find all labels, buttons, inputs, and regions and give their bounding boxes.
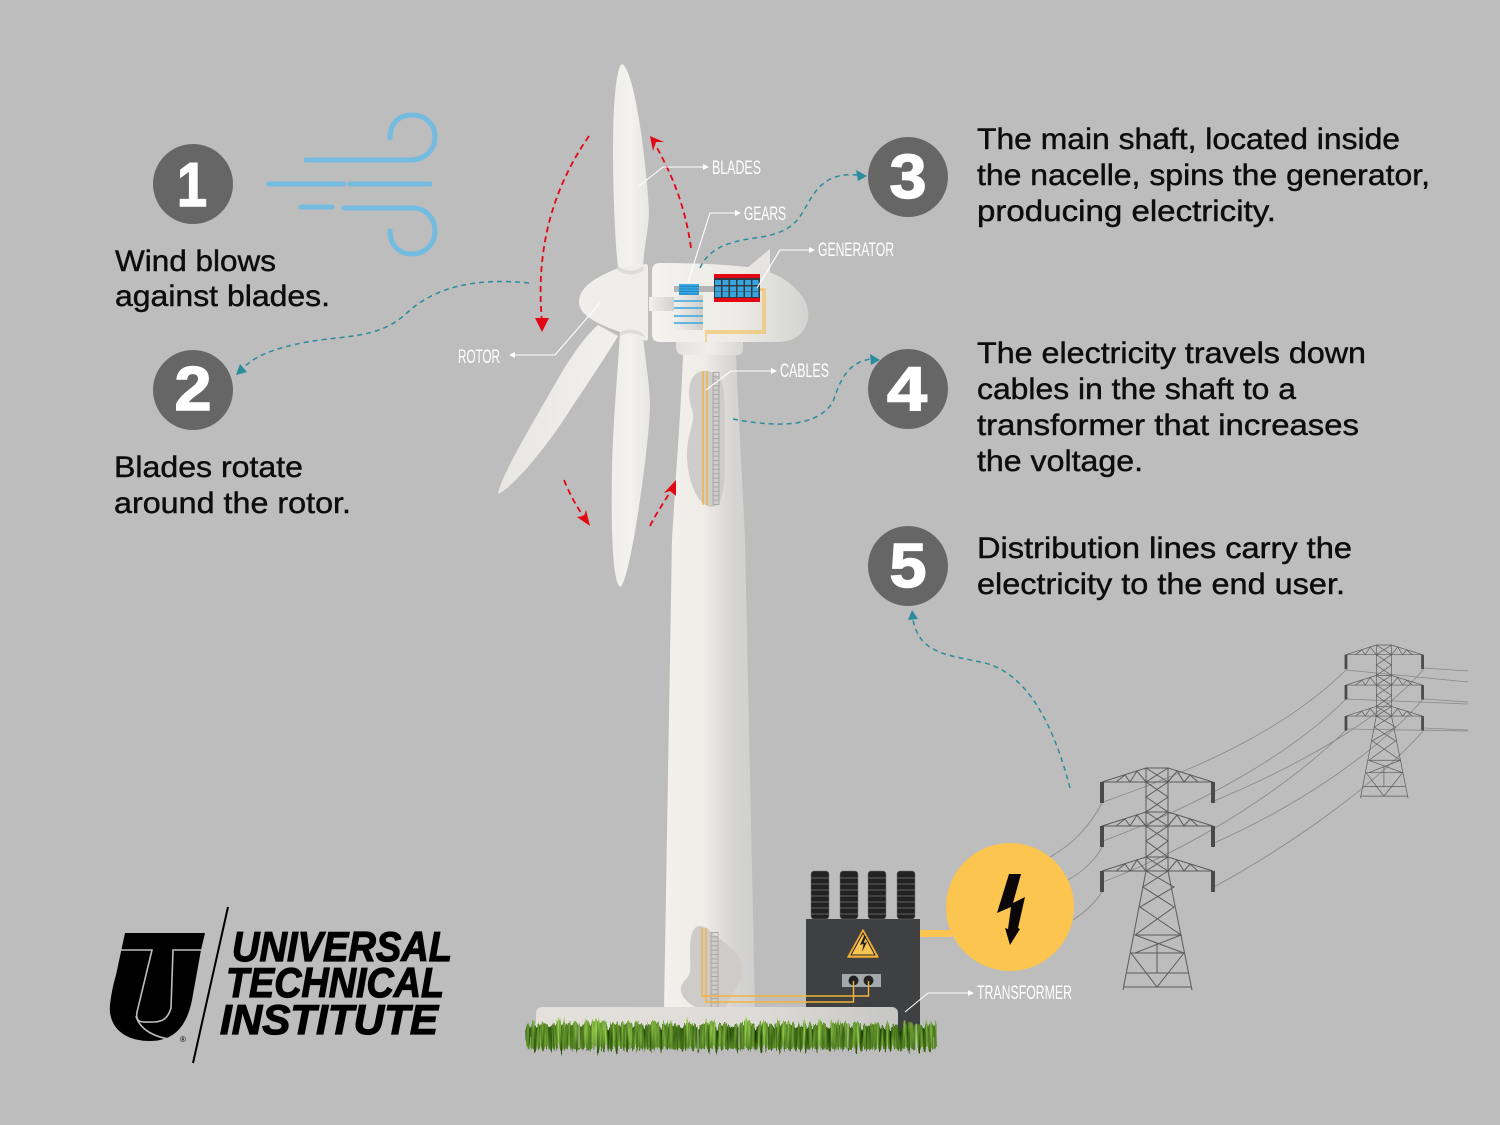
grass bbox=[527, 1022, 936, 1050]
step 3 number bbox=[868, 137, 948, 217]
step 4 text: transformer that increases bbox=[977, 409, 1359, 442]
label: transformer: TRANSFORMER bbox=[977, 983, 1072, 1004]
label: rotor: ROTOR bbox=[458, 347, 500, 368]
step 1 bbox=[115, 144, 330, 313]
step 3 bbox=[868, 123, 1430, 228]
step 5 text: electricity to the end user. bbox=[977, 568, 1345, 601]
arrow: downward left bbox=[535, 136, 589, 332]
blade: bottom bbox=[612, 329, 650, 587]
nacelle fin bbox=[747, 249, 770, 280]
step 3 text bbox=[977, 123, 1430, 228]
main shaft bbox=[674, 286, 716, 292]
step 3 text: the nacelle, spins the generator, bbox=[977, 159, 1430, 192]
step 2 text: around the rotor. bbox=[114, 487, 351, 520]
logo wordmark: TECHNICAL bbox=[226, 959, 444, 1006]
blade roots bbox=[617, 266, 645, 338]
step 1 number bbox=[153, 144, 233, 224]
main shaft stub bbox=[649, 297, 675, 311]
rotor hub bbox=[579, 264, 648, 341]
logo wordmark bbox=[220, 923, 452, 1043]
step 1 text: Wind blows bbox=[115, 245, 276, 278]
arrow: upward right bbox=[650, 136, 691, 248]
nacelle bbox=[652, 263, 808, 342]
icon: electricity circle bbox=[946, 843, 1074, 971]
label: rotor bbox=[458, 303, 600, 368]
icon: warning triangle bbox=[848, 930, 878, 957]
lower tower cutaway bbox=[681, 926, 742, 1010]
label: generator: GENERATOR bbox=[818, 240, 894, 261]
step 4 bbox=[868, 337, 1366, 478]
logo wordmark: UNIVERSAL bbox=[232, 923, 452, 970]
label: transformer bbox=[905, 983, 1072, 1012]
label: cables: CABLES bbox=[780, 361, 829, 382]
teal connector: tower to step 4 bbox=[733, 354, 880, 424]
arrow: lower up bbox=[650, 480, 676, 526]
wind turbine bbox=[498, 64, 808, 1010]
step 5 bbox=[868, 526, 1352, 606]
blade: left bbox=[498, 325, 618, 494]
logo wordmark: INSTITUTE bbox=[220, 996, 440, 1043]
logo mark bbox=[110, 933, 205, 1044]
sockets bbox=[842, 974, 881, 987]
label: cables bbox=[706, 361, 829, 390]
step 3 number: 3 bbox=[890, 143, 926, 212]
blade: top bbox=[613, 64, 649, 272]
logo divider bbox=[193, 907, 228, 1063]
step 2 text: Blades rotate bbox=[114, 451, 303, 484]
step 4 number bbox=[868, 349, 948, 429]
upper tower cutaway bbox=[687, 371, 725, 507]
label: generator bbox=[757, 240, 894, 288]
tower bbox=[664, 355, 755, 1010]
logo mark: ® bbox=[180, 1035, 186, 1044]
step 2 bbox=[114, 350, 351, 520]
step 4 text bbox=[977, 337, 1366, 478]
step 1 text bbox=[115, 245, 330, 313]
step 4 text: the voltage. bbox=[977, 445, 1143, 478]
teal connector: power lines to step 5 bbox=[908, 610, 1070, 788]
step 5 number: 5 bbox=[890, 532, 926, 601]
rotation arrows bbox=[535, 136, 691, 526]
gear: lower bbox=[674, 295, 703, 330]
arrow: lower down bbox=[564, 480, 590, 526]
step 4 text: cables in the shaft to a bbox=[977, 373, 1296, 406]
step 3 text: The main shaft, located inside bbox=[977, 123, 1400, 156]
tower collar bbox=[676, 340, 743, 355]
concrete base bbox=[536, 1007, 898, 1037]
step 5 number bbox=[868, 526, 948, 606]
step 2 number: 2 bbox=[174, 355, 212, 424]
insulators bbox=[811, 871, 915, 919]
power lines bbox=[1050, 668, 1468, 920]
step 2 text bbox=[114, 451, 351, 520]
gear: upper bbox=[679, 284, 699, 295]
teal connector: nacelle to step 3 bbox=[700, 170, 867, 268]
label: blades bbox=[639, 158, 761, 186]
step 1 text: against blades. bbox=[115, 280, 330, 313]
transformer body bbox=[806, 919, 920, 1040]
step 2 number bbox=[153, 350, 233, 430]
nacelle cables bbox=[705, 289, 765, 342]
logo: Universal Technical Institute bbox=[110, 907, 452, 1063]
label: gears: GEARS bbox=[744, 204, 786, 225]
step 4 text: The electricity travels down bbox=[977, 337, 1366, 370]
step 1 number: 1 bbox=[177, 151, 207, 220]
icon: near transmission tower bbox=[1100, 768, 1215, 990]
label: blades: BLADES bbox=[712, 158, 761, 179]
transformer bbox=[806, 871, 920, 1040]
step 5 text bbox=[977, 532, 1352, 601]
step 4 number: 4 bbox=[887, 355, 928, 424]
label: gears bbox=[688, 204, 786, 282]
step 5 text: Distribution lines carry the bbox=[977, 532, 1352, 565]
base cables bbox=[702, 928, 868, 1002]
step 3 text: producing electricity. bbox=[977, 195, 1276, 228]
icon: wind bbox=[269, 115, 435, 254]
teal connector: rotor to step 2 bbox=[236, 281, 529, 375]
yellow connector bbox=[920, 930, 952, 937]
generator bbox=[714, 274, 760, 302]
icon: far transmission tower bbox=[1345, 645, 1424, 798]
